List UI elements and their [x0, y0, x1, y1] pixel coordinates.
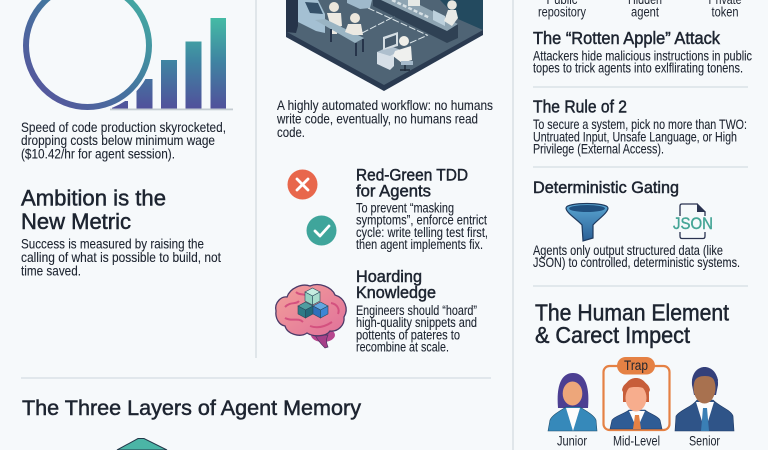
dashed floor lines: [362, 8, 428, 43]
chart: rising bars behind ring: [20, 0, 233, 112]
heading: hoarding: Knowledge: [356, 283, 436, 302]
text: ambition description: calling of what is possible to build, not: [21, 250, 221, 265]
heading: human element: & Carect Impect: [535, 322, 691, 348]
panel: hoarding knowledge: [276, 267, 477, 354]
figure: mid-level in trap: [604, 357, 670, 430]
text: automated workflow description: write code, eventually, no humans read: [276, 112, 478, 126]
text: automated workflow description: code.: [277, 125, 305, 140]
icon: funnel: [566, 204, 608, 241]
text: hoarding description: pottents of pateres to: [356, 328, 460, 342]
heading: ambition: New Metric: [21, 209, 131, 234]
text: speed description: dropping costs below minimum wage: [21, 133, 215, 148]
text: rule of 2 description: Privilege (External Access).: [533, 142, 664, 156]
icon: JSON document: [673, 203, 713, 238]
icon: top memory layer: [117, 438, 167, 450]
labels: career levels: Senior: [689, 434, 720, 448]
heading: TDD: Red-Green TDD: [356, 166, 468, 184]
labels: attack chain: token: [712, 4, 738, 20]
text: TDD description: symptoms”, enforce entrict: [356, 212, 487, 228]
heading: memory layers: The Three Layers of Agent Memory: [22, 396, 361, 420]
desk with seated worker: [315, 19, 364, 43]
text: speed description: Speed of code production skyrocketed,: [21, 120, 226, 135]
panel: human element and career impact: [535, 300, 734, 448]
back cabinet: [347, 0, 372, 9]
figure: senior: [675, 367, 734, 431]
panel: ambition metric: [21, 186, 221, 278]
text: TDD description: To prevent “masking: [356, 200, 454, 216]
heading: rotten apple: The “Rotten Apple” Attack: [533, 28, 720, 48]
labels: attack chain: repository: [538, 4, 586, 20]
text: hoarding description: Engineers should “hoard”: [356, 303, 477, 318]
text: TDD description: cycle: write telling test first,: [356, 225, 488, 240]
text: speed description: ($10.42/hr for agent session).: [21, 146, 175, 162]
left machine: [298, 0, 325, 33]
labels: career levels: Junior: [557, 434, 587, 448]
icon: JSON document: JSON: [673, 215, 713, 233]
text: automated workflow description: A highly automated workflow: no humans: [277, 98, 493, 113]
standing worker: [329, 2, 339, 12]
front computer station: [377, 49, 394, 70]
heading: TDD: for Agents: [356, 182, 431, 200]
badge: trap: Trap: [624, 358, 648, 373]
panel: rotten apple attack: [533, 0, 752, 76]
text: TDD description: then agent implements fix.: [356, 237, 483, 252]
heading: ambition: Ambition is the: [21, 186, 166, 210]
text: hoarding description: high-quality snippets and: [356, 315, 477, 330]
panel: rule of 2: [533, 96, 747, 156]
text: ambition description: time saved.: [21, 264, 81, 278]
heading: hoarding: Hoarding: [356, 267, 422, 286]
heading: rule of 2: The Rule of 2: [533, 96, 627, 116]
icon: brain with cubes: [276, 285, 346, 348]
panel: deterministic gating: [533, 179, 740, 270]
labels: career levels: Mid-Level: [613, 434, 660, 448]
text: hoarding description: recombine at scale.: [356, 340, 449, 354]
right bench: [373, 0, 458, 43]
panel: red-green TDD: [288, 166, 488, 252]
heading: human element: The Human Element: [535, 300, 730, 326]
heading: gating: Deterministic Gating: [533, 179, 679, 197]
illustration: isometric automated workspace: [286, 0, 483, 91]
cubes: [298, 288, 328, 318]
panel: speed of code production: [20, 0, 233, 162]
panel: three layers of agent memory: [22, 396, 361, 450]
icon: green check: [306, 216, 336, 246]
labels: attack chain: agent: [631, 4, 659, 20]
figure: junior: [548, 373, 597, 431]
text: gating description: Agents only output structured data (like: [533, 243, 723, 258]
icon: red cross: [288, 170, 318, 200]
text: ambition description: Success is measured by raising the: [21, 236, 204, 252]
